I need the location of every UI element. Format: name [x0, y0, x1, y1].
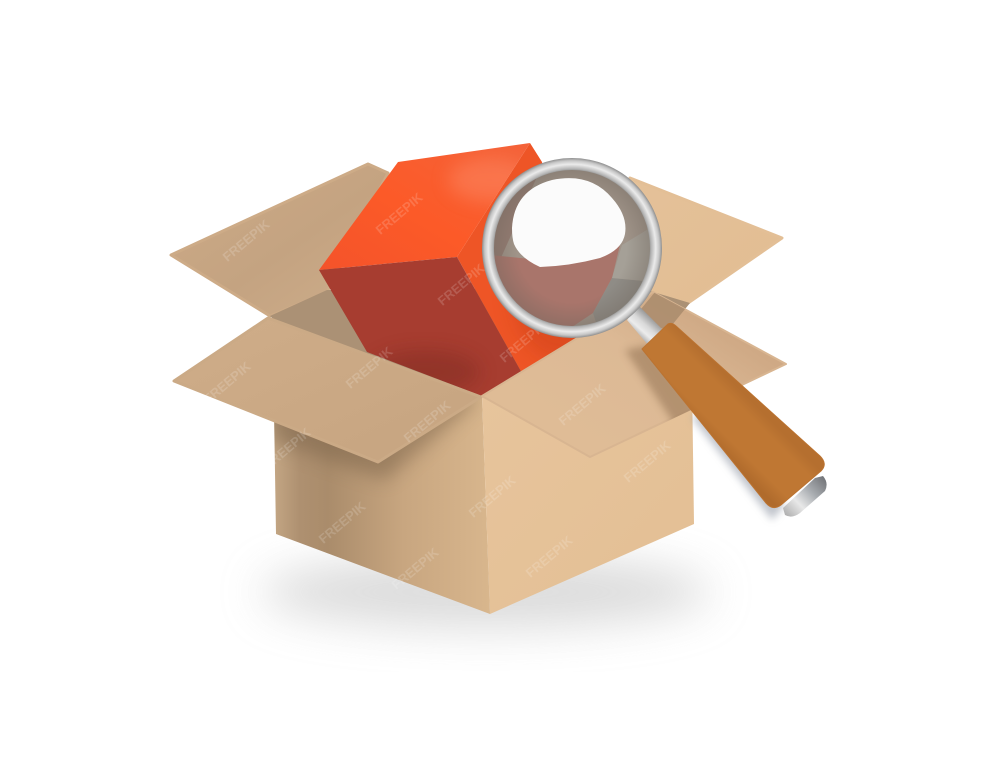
box left face: [270, 396, 490, 614]
red cube: [319, 143, 576, 396]
watermarks: FREEPIK: [220, 216, 273, 264]
wooden handle: [642, 323, 824, 508]
box right face: [482, 380, 694, 614]
ground shadow: [261, 556, 711, 628]
watermarks: FREEPIK: [389, 544, 442, 592]
watermarks: FREEPIK: [401, 397, 454, 445]
lens: [494, 170, 650, 326]
handle shadow below: [692, 412, 785, 520]
watermarks: FREEPIK: [523, 532, 576, 580]
lens rim: [482, 158, 662, 338]
illustration: open cardboard box with red cube and magnifying glass: [170, 143, 827, 644]
magnifying glass: [482, 158, 827, 520]
watermarks: [201, 189, 674, 592]
cube left face: [319, 257, 523, 396]
back right flap: [630, 178, 782, 303]
watermarks: FREEPIK: [621, 437, 674, 485]
watermarks: FREEPIK: [466, 472, 519, 520]
cube right face: [457, 143, 576, 371]
back left flap: [171, 164, 388, 316]
box interior: [270, 288, 690, 396]
end cap: [783, 476, 827, 517]
watermarks: FREEPIK: [261, 424, 314, 472]
lens orange tint at left: [494, 179, 536, 256]
front left flap: [174, 318, 481, 462]
watermarks: FREEPIK: [316, 498, 369, 546]
watermarks: FREEPIK: [435, 260, 488, 308]
lens red reflection: [494, 245, 620, 326]
lens light facet: [612, 230, 650, 280]
watermarks: FREEPIK: [343, 343, 396, 391]
front right flap: [482, 292, 786, 457]
cube top face: [319, 143, 532, 270]
lens highlight: [512, 178, 625, 267]
watermarks: FREEPIK: [556, 380, 609, 428]
handle shadow on flap: [624, 293, 690, 420]
lens grey facet: [593, 278, 642, 322]
watermarks: FREEPIK: [497, 317, 550, 365]
metal shaft: [627, 305, 663, 345]
watermarks: FREEPIK: [201, 358, 254, 406]
lens vignette: [493, 169, 651, 327]
watermarks: FREEPIK: [373, 189, 426, 237]
